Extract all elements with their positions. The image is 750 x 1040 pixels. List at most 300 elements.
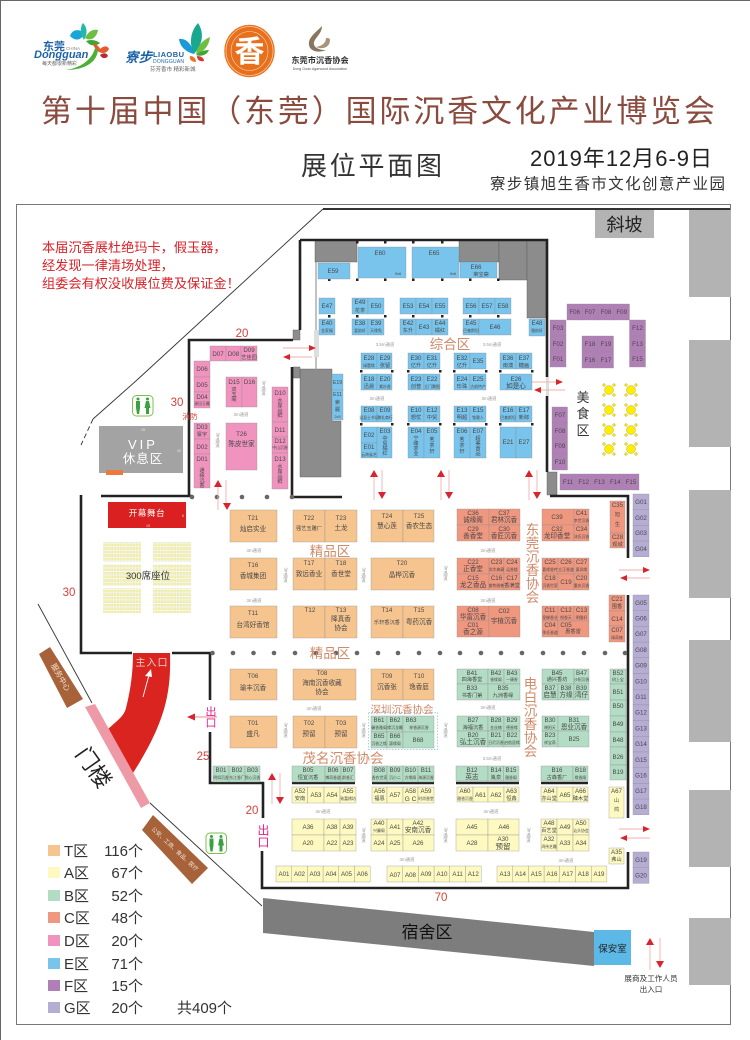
- booths: E zone: E19: [333, 380, 342, 386]
- aisle labels: 3.5m通道: [376, 341, 395, 348]
- booths: G zone: G04: [635, 546, 647, 553]
- booths: C zone: 善香堂: [463, 531, 483, 540]
- booths: T zone: 强艺玉雕厂: [296, 524, 322, 532]
- booths: B zone: 香农世家: [372, 775, 387, 780]
- booths: C zone: 香之源: [463, 627, 483, 636]
- booths: E zone: 峰: [413, 439, 419, 447]
- aisle labels: 3m通道: [481, 547, 496, 554]
- booths: T zone: 晶桦沉香: [389, 570, 416, 579]
- booths: E zone: E56: [465, 303, 477, 310]
- booths: B zone: B48: [612, 737, 624, 744]
- aisle labels: 3m通道: [481, 704, 496, 711]
- booths: A zone: 山: [614, 796, 619, 804]
- booths: C zone: 喜缘香传: [542, 567, 558, 572]
- booths: D zone: 阁: [231, 395, 237, 403]
- booths: C zone: C19: [560, 579, 572, 586]
- booths: T zone: 致远香业: [296, 569, 323, 578]
- booths: D zone: D07: [212, 351, 224, 358]
- booths: A zone: A61: [475, 792, 487, 799]
- booths: T zone: T10: [414, 673, 425, 680]
- booths: D zone: [194, 346, 288, 489]
- booths: T zone: 海南沉香收藏: [302, 678, 342, 687]
- logo: agarwood association: 东莞市沉香协会: [291, 55, 349, 65]
- booths: E zone: 茶: [429, 441, 435, 449]
- booths: A zone: 鸿伟艺雕: [541, 844, 557, 849]
- booths: E zone: E03: [379, 428, 391, 435]
- booths: E zone: E08: [363, 407, 375, 414]
- booths: B zone: 博奇香道: [325, 775, 341, 780]
- booths: D zone: 缘: [199, 471, 205, 479]
- booths: T zone: 乐轩香沉香: [374, 618, 400, 626]
- booths: G zone: G07: [635, 631, 647, 638]
- booths: C zone: 李世沉香: [574, 518, 589, 523]
- booths: B zone: B23: [544, 732, 556, 739]
- logo: orange seal: 香: [234, 36, 264, 69]
- aisle labels: 3m通道: [316, 808, 331, 815]
- legend: 20个: [111, 1000, 143, 1017]
- booths: T zone: 预留: [302, 729, 316, 738]
- booths: C zone: C01: [467, 622, 479, 629]
- booths: B zone: B22: [506, 732, 518, 739]
- booths: C zone: 皇御香业: [542, 615, 558, 620]
- booths: B zone: B42: [490, 670, 502, 677]
- booths: E zone: E45: [465, 320, 477, 327]
- booths: B zone: B43: [506, 670, 518, 677]
- booths: B zone: B10: [405, 767, 417, 774]
- booths: T zone: T17: [304, 560, 315, 567]
- booths: E zone: 金家福: [321, 328, 333, 333]
- booths: T zone: T24: [382, 513, 393, 520]
- booths: E zone: E10: [410, 407, 422, 414]
- booths: E zone: 贸: [382, 439, 388, 447]
- booths: E zone: 轩: [429, 447, 435, 455]
- aisle labels: 3m通道: [559, 857, 574, 864]
- booths: E zone: 创普: [411, 382, 421, 390]
- booths: E zone: 中: [382, 434, 388, 442]
- booths: D zone: D13: [274, 456, 286, 463]
- booths: C zone: 沉香世家: [542, 583, 558, 588]
- opening stage: 15: [146, 524, 150, 528]
- booths: C zone: C39: [551, 514, 563, 521]
- aisle labels: 3m通道: [283, 723, 288, 739]
- booths: A zone: A26: [412, 840, 424, 847]
- booths: A zone: A49: [559, 824, 571, 831]
- booths: A zone: A14: [515, 871, 527, 878]
- booths: D zone: D12: [274, 438, 286, 445]
- booths: A zone: A48: [543, 820, 555, 827]
- legend: 15个: [111, 978, 143, 995]
- booths: F zone: F09: [616, 309, 628, 316]
- booths: E zone: E49: [354, 299, 366, 306]
- booths: G zone: G02: [635, 515, 647, 522]
- booths: B zone: 祥宝斋: [544, 740, 556, 745]
- booths: D zone: 源田玉雕: [194, 401, 210, 406]
- booths: C zone: C20: [576, 575, 588, 582]
- booths: C zone: 宇植沉香: [491, 616, 518, 625]
- booths: F zone: F18: [585, 341, 596, 348]
- booths: B zone: B27: [467, 717, 479, 724]
- booths: A zone: A08: [405, 872, 417, 879]
- booths: B zone: B15: [505, 767, 517, 774]
- booths: T zone: 台湾好香馆: [237, 620, 270, 629]
- dimension labels: 30: [171, 397, 183, 409]
- booths: A zone: G C: [405, 796, 417, 803]
- booths: A zone: A23: [342, 840, 354, 847]
- booths: A zone: A58: [405, 788, 417, 795]
- booths: E zone: 东升: [403, 326, 413, 334]
- booths: B zone: 金丝楠: [490, 725, 502, 730]
- booths: B zone: B25: [568, 736, 580, 743]
- slope: [595, 210, 654, 238]
- legend: [48, 843, 232, 1017]
- booths: A zone: 福恩: [374, 794, 385, 802]
- booths: E zone: 巴基斯坦: [500, 415, 516, 420]
- booths: E zone: E37: [518, 355, 530, 362]
- booths: T zone: 逸香庭: [409, 682, 429, 691]
- Shenzhen association block: 沉香之缘: [371, 741, 387, 746]
- booths: D zone: 品: [277, 473, 283, 480]
- dimension labels: [63, 328, 447, 904]
- booths: E zone: E53: [402, 303, 414, 310]
- aisle labels: 3.5m通道: [483, 341, 502, 348]
- booths: C zone: C26: [560, 559, 572, 566]
- booths: B zone: B18: [575, 767, 587, 774]
- booths: E zone: 轩: [459, 447, 465, 455]
- booths: D zone: 水: [277, 396, 283, 404]
- booths: C zone: 悦香天: [560, 615, 572, 620]
- booths: E zone: 荣宝斋: [473, 270, 489, 278]
- booths: E zone: 亿升: [427, 361, 437, 369]
- aisle labels: 3m通道: [361, 723, 366, 739]
- logo: Dongguan: CHINA: [66, 46, 80, 51]
- booths: A zone: A12: [468, 871, 479, 878]
- VIP lounge: 10: [177, 449, 181, 453]
- booths: B zone: B39: [576, 685, 588, 692]
- booths: E zone: 美: [475, 439, 481, 447]
- booths: C zone: [457, 501, 625, 642]
- notice: 经发现一律清场处理，: [42, 258, 174, 273]
- booths: C zone: C21: [611, 596, 623, 603]
- booths: E zone: E27: [518, 439, 530, 446]
- booths: A zone: 鸿: [614, 805, 619, 813]
- booths: B zone: [213, 669, 626, 782]
- legend: A区: [64, 865, 89, 882]
- booths: E zone: E02: [363, 432, 375, 439]
- booths: F zone: F12: [578, 479, 590, 486]
- booths: A zone: A40: [373, 820, 385, 827]
- aisle labels: 3m通道: [370, 395, 385, 402]
- booths: D zone: D08: [228, 351, 240, 358]
- booths: B zone: B05: [302, 767, 314, 774]
- door gaps: [314, 330, 549, 396]
- booths: B zone: B09: [389, 767, 401, 774]
- booths: C zone: C04: [544, 622, 556, 629]
- booths: A zone: A66: [575, 788, 587, 795]
- public services: 公安、工商、食品、医疗: [150, 825, 201, 873]
- booths: D zone: 中山沉香: [272, 445, 288, 450]
- booths: C zone: C15: [467, 575, 479, 582]
- booths: F zone: F02: [553, 341, 564, 348]
- booths: F zone: F17: [601, 357, 612, 364]
- booths: A zone: A59: [420, 788, 432, 795]
- booths: F zone: F01: [553, 356, 564, 363]
- neighbouring buildings: [689, 210, 731, 985]
- booths: A zone: A04: [325, 871, 337, 878]
- service centre: [39, 647, 83, 708]
- food area label: [576, 390, 590, 438]
- booths: B zone: 恩业沉香: [561, 722, 588, 731]
- booths: D zone: D03: [196, 424, 208, 431]
- booths: F zone: F19: [601, 341, 612, 348]
- booths: B zone: 树上宝: [612, 677, 624, 682]
- logo: Liaobu: DONGGUAN: [153, 59, 184, 65]
- booths: E zone: 索: [335, 398, 340, 406]
- Shenzhen association block: B63: [405, 717, 417, 724]
- booths: G zone: G09: [635, 663, 647, 670]
- booths: A zone: A02: [294, 871, 306, 878]
- legend: E区: [64, 956, 89, 973]
- booths: B zone: B51: [612, 689, 624, 696]
- booths: A zone: A18: [578, 871, 589, 878]
- booths: B zone: B26: [612, 754, 624, 761]
- booths: E zone: E31: [426, 355, 438, 362]
- booths: F zone: F07: [585, 309, 596, 316]
- venue address: 寮步镇旭生香市文化创意产业园: [490, 174, 725, 193]
- booths: E zone: 花茶: [355, 306, 366, 314]
- booths: T zone: T06: [248, 673, 259, 680]
- booths: A zone: A67: [611, 788, 623, 795]
- booths: E zone: E46: [489, 324, 501, 331]
- booths: E zone: E35: [472, 358, 484, 365]
- booths: A zone: 汕头协会: [573, 828, 589, 833]
- booths: B zone: B11: [421, 767, 432, 774]
- booths: B zone: B02: [231, 767, 243, 774]
- booths: C zone: C02: [498, 608, 510, 615]
- booths: B zone: 英志: [465, 772, 479, 781]
- booths: F zone: F08: [601, 309, 612, 316]
- booths: A zone: A07: [389, 872, 401, 879]
- Shenzhen association block: 缘沉龙雕: [387, 725, 403, 730]
- booths: T zone: 预留: [334, 729, 348, 738]
- opening stage: 6: [182, 514, 184, 518]
- booths: F zone: F12: [632, 325, 643, 332]
- booths: T zone: T11: [248, 610, 259, 617]
- logo: Dongguan: 东莞: [43, 39, 65, 53]
- booths: B zone: B06: [327, 767, 339, 774]
- booths: E zone: E23: [410, 376, 422, 383]
- booths: F zone: F13: [632, 341, 643, 348]
- security room: 保安室: [598, 943, 627, 955]
- booths: C zone: C37: [498, 510, 510, 517]
- booths: B zone: 湾仔: [575, 690, 588, 699]
- booths: C zone: 惠香雷: [565, 627, 581, 635]
- logo: orange seal: [224, 24, 275, 78]
- booths: E zone: E39: [370, 320, 382, 327]
- zone label: boutique upper: 精品区: [310, 544, 350, 559]
- booths: T zone: T22: [304, 515, 315, 522]
- booths: B zone: 古森香厂: [547, 773, 567, 781]
- booths: A zone: A17: [562, 871, 574, 878]
- booths: T zone: T02: [304, 720, 315, 727]
- booths: B zone: 沉小二: [389, 775, 401, 780]
- booths: D zone: 鲜: [277, 411, 283, 419]
- booths: B zone: 方缘阁: [405, 775, 416, 780]
- exhibition hall walls: [81, 240, 628, 888]
- flow arrows: [214, 345, 650, 841]
- booths: A zone: A41: [389, 824, 401, 831]
- booths: C zone: C36: [467, 510, 479, 517]
- booths: E zone: 如是心: [506, 381, 526, 390]
- booths: B zone: B03: [247, 767, 259, 774]
- booths: C zone: C13: [576, 607, 588, 614]
- booths: E zone: 宁: [413, 434, 419, 442]
- booths: E zone: E11: [333, 392, 342, 398]
- site boundary lines: [38, 209, 730, 906]
- booths: B zone: B37: [544, 685, 556, 692]
- booths: B zone: B31: [568, 717, 580, 724]
- booths: G zone: G15: [635, 757, 647, 764]
- booths: T zone: T13: [336, 607, 347, 614]
- booths: B zone: B21: [490, 732, 502, 739]
- booths: D zone: D04: [196, 394, 208, 401]
- booths: E zone: E40: [321, 320, 333, 327]
- aisle labels: 3m通道: [443, 828, 448, 844]
- booths: E zone: 立门腾图: [424, 384, 440, 389]
- legend: 116个: [104, 843, 143, 860]
- booths: F zone: F15: [626, 479, 637, 486]
- zone label: Dianbai association: 电白沉香协会: [522, 676, 537, 758]
- booths: C zone: 紫荆香榭: [489, 583, 504, 588]
- dimension labels: 消防: [182, 411, 198, 421]
- booths: E zone: 新郎: [519, 413, 529, 421]
- legend: 共409个: [177, 1000, 232, 1017]
- booths: C zone: 重庆沉香: [574, 583, 589, 588]
- booths: C zone: C16: [491, 575, 503, 582]
- booths: C zone: C12: [560, 607, 572, 614]
- Shenzhen association block: B68: [412, 737, 424, 744]
- legend: T区: [64, 843, 88, 860]
- booths: E zone: 天缘兔: [370, 328, 382, 333]
- booths: E zone: 亿升: [457, 361, 467, 369]
- booths: T zone: 香城集团: [240, 571, 267, 580]
- aisle labels: 3m通道: [361, 568, 366, 584]
- Shenzhen association block: B66: [389, 733, 401, 740]
- booths: T zone: T12: [305, 607, 316, 614]
- booths: A zone: 亦山堂: [541, 794, 557, 802]
- staff entrance: 出入口: [640, 984, 662, 994]
- logo: Dongguan: Dongguan: [34, 49, 89, 61]
- booths: A zone: A16: [546, 871, 558, 878]
- booths: G zone: G01: [635, 499, 647, 506]
- booths: D zone: 香: [199, 481, 205, 489]
- Shenzhen association block: B61: [373, 717, 385, 724]
- booths: T zone: 粤药沉香: [406, 617, 433, 626]
- booths: E zone: 亿升: [411, 361, 421, 369]
- booths: B zone: B47: [576, 670, 588, 677]
- booths: T zone: 协会: [334, 623, 348, 632]
- booths: E zone: E44: [434, 320, 446, 327]
- booths: A zone: 预留: [496, 841, 510, 851]
- booths: A zone: A57: [389, 792, 401, 799]
- dimension labels: 25: [197, 751, 209, 763]
- booths: E zone: E25: [472, 376, 484, 383]
- zone label: Dongguan association: 东莞沉香协会: [524, 522, 539, 604]
- booths: E zone: E17: [518, 407, 530, 414]
- booths: B zone: 香缘阁: [490, 677, 502, 682]
- booths: B zone: 明如沉香: [213, 775, 229, 780]
- food area label: 食: [576, 406, 590, 421]
- booths: C zone: C28: [612, 534, 624, 541]
- booths: E zone: 绿蕾缘: [363, 363, 375, 368]
- booths: D zone: D15: [228, 379, 240, 386]
- booths: E zone: E47: [321, 303, 333, 310]
- legend: B区: [64, 888, 89, 905]
- aisle labels: 3m通道: [247, 547, 262, 554]
- public services: [142, 815, 208, 884]
- booths: C zone: C34: [576, 526, 588, 533]
- booths: T zone: T21: [248, 515, 259, 522]
- legend: 48个: [111, 910, 143, 927]
- booths: B zone: 群香汇: [342, 775, 354, 780]
- booths: E zone: 2x5: [334, 414, 341, 419]
- booths: B zone: 悦心沉香: [245, 775, 260, 780]
- aisle labels: 3m通道: [307, 705, 322, 712]
- booths: G zone: G20: [635, 872, 647, 880]
- booths: E zone: E20: [379, 376, 391, 383]
- booths: D zone: 通: [199, 466, 205, 474]
- booths: E zone: 茶: [459, 441, 465, 449]
- booths: B zone: B29: [506, 717, 518, 724]
- booths: E zone: E24: [456, 376, 468, 383]
- booths: T zone: 土龙: [334, 523, 348, 532]
- booths: A zone: A05: [341, 871, 353, 878]
- booths: E zone: E50: [370, 303, 382, 310]
- booths: E zone: E43: [418, 324, 430, 331]
- booths: A zone: A35: [611, 849, 623, 856]
- booths: B zone: 九洲香缘: [493, 691, 513, 699]
- toilet icon lower: [206, 833, 226, 854]
- booths: E zone: 爱韵轩: [354, 328, 366, 333]
- booths: E zone: E09: [379, 407, 391, 414]
- booths: D zone: D11: [275, 427, 286, 434]
- VIP lounge: 15: [141, 428, 145, 432]
- booths: C zone: C24: [506, 559, 518, 566]
- booths: B zone: B28: [490, 717, 502, 724]
- booths: C zone: 绿奇楠: [611, 635, 623, 640]
- booths: T zone: 香农生态: [406, 521, 433, 530]
- booths: E zone: E59: [327, 268, 339, 275]
- booths: A zone: A45: [466, 824, 478, 831]
- booths: A zone: 时尚香堂: [418, 796, 434, 801]
- booths: B zone: B38: [560, 685, 572, 692]
- booths: B zone: 晓阳天: [544, 725, 556, 730]
- booths: E zone: 南澳: [503, 361, 514, 369]
- booths: D zone: D16: [244, 379, 256, 386]
- booths: A zone: 兴馨阁: [373, 828, 385, 833]
- booths: A zone: A25: [389, 840, 401, 847]
- booths: E zone: 红: [382, 449, 388, 457]
- booths: C zone: 观城: [612, 541, 623, 548]
- dimension labels: 20: [246, 805, 258, 817]
- booths: T zone: [230, 510, 434, 748]
- booths: E zone: E54: [418, 303, 430, 310]
- booths: A zone: A03: [309, 871, 321, 878]
- booths: E zone: 茗: [459, 435, 465, 443]
- booths: E zone: E29: [379, 355, 391, 362]
- booths: E zone: E07: [472, 428, 484, 435]
- booths: C zone: C35: [612, 502, 624, 509]
- booths: E zone: E26: [510, 376, 522, 383]
